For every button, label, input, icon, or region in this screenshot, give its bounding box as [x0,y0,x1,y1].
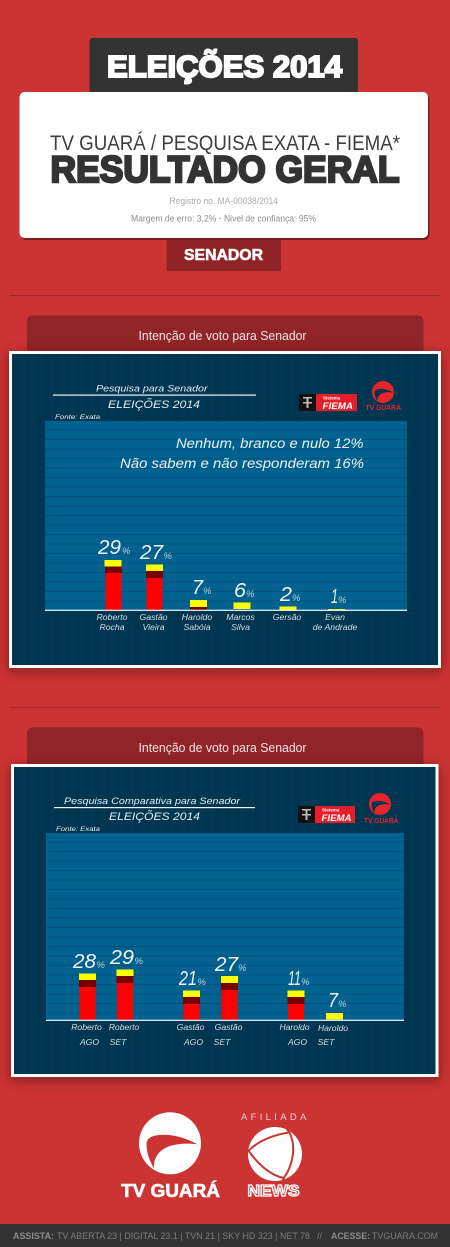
logo: afiliada record news: AFILIADA [241,1112,310,1123]
value labels: 29 [97,537,121,559]
chart title: ELEIÇÕES 2014 [109,810,200,823]
header tab: Intenção de voto para Senador [138,741,306,755]
survey name: TV GUARÁ / PESQUISA EXATA - FIEMA* [50,130,401,155]
heading: resultado geral: RESULTADO GERAL [50,149,400,190]
chart frame [12,766,437,1076]
chart title [53,384,256,421]
value labels: 27 [214,954,239,976]
candidate labels: Marcos [226,612,255,622]
plot area [45,421,407,610]
note: undecided voters [120,435,364,471]
candidate labels: AGO [287,1037,307,1047]
chart title [54,796,255,833]
value labels: % [164,551,172,562]
panel: white header card [20,92,430,240]
title banner: Eleições 2014 [90,38,358,98]
chart title: ELEIÇÕES 2014 [108,398,200,411]
chart title: Pesquisa Comparativa para Senador [64,796,241,807]
candidate labels: Haroldo [318,1023,348,1033]
candidate labels: Roberto [97,612,128,622]
logo: tv guará small [364,793,399,825]
candidate labels: de Andrade [313,622,357,632]
candidate labels: Gastão [139,612,168,622]
value labels [72,947,347,1012]
logo: tv guará small [366,381,402,412]
value labels: % [96,960,106,971]
candidate labels [97,612,357,632]
footer bar: ACESSE: [331,1231,370,1241]
value labels: % [238,963,247,974]
value labels: 21 [178,968,197,990]
registration number: Registro no. MA-00038/2014 [170,196,278,206]
logo: tv guará: TV GUARÁ [121,1180,220,1201]
value labels: % [203,586,212,597]
candidate labels: Rocha [99,622,125,632]
footer bar: TV ABERTA 23 | DIGITAL 23.1 | TVN 21 | SKY HD 323 | NET 78 [57,1231,310,1241]
margin of error: Margem de erro: 3,2% - Nivel de confiança: 95% [131,214,316,224]
candidate labels: Roberto [71,1022,102,1032]
candidate labels: Gersão [273,612,301,622]
value labels [97,537,347,608]
value labels: % [338,595,347,606]
value labels: 7 [328,990,339,1012]
logo: tv guará small: TV GUARÁ [364,816,399,825]
value labels: % [301,977,310,988]
candidate labels: Gastão [177,1022,205,1032]
note: undecided voters: Não sabem e não responderam 16% [120,455,364,471]
logo: sistema fiema: FIEMA [322,813,352,823]
note: undecided voters: Nenhum, branco e nulo 12% [176,435,364,451]
candidate labels: Haroldo [279,1022,310,1032]
plot area [46,833,404,1020]
candidate labels: SET [318,1037,335,1047]
footer bar: ASSISTA: [13,1231,54,1241]
chart title: Fonte: Exata [56,826,100,833]
value labels: 28 [72,951,96,973]
panel: voting intention chart 1 [10,316,440,666]
value labels: % [134,956,144,967]
footer bar: // [317,1231,323,1241]
header tab: Intenção de voto para Senador [138,329,306,343]
logo: sistema fiema [298,806,355,823]
candidate labels: Haroldo [182,612,212,622]
value labels: 6 [234,580,247,602]
chart frame [10,352,440,666]
logo: tv guará small: TV GUARÁ [366,403,402,412]
candidate labels: Silva [231,622,250,632]
logo: sistema fiema: Sistema [323,396,341,400]
logo: tv guará [121,1112,220,1201]
bars [79,970,343,1020]
panel: comparative voting intention chart 2 [12,728,437,1076]
logo: afiliada record news [241,1112,310,1200]
chart title: Fonte: Exata [55,414,100,421]
value labels: 29 [109,947,134,969]
value labels: 27 [139,542,164,564]
badge: senador [166,240,281,271]
title banner: Eleições 2014: ELEIÇÕES 2014 [107,48,343,84]
candidate labels: SET [214,1037,231,1047]
value labels: 11 [288,968,301,990]
footer bar [0,1224,450,1247]
candidate labels: AGO [79,1037,99,1047]
value labels: 2 [279,584,292,606]
candidate labels: AGO [183,1037,203,1047]
value labels: % [338,999,347,1010]
value labels: 7 [192,577,204,599]
chart title: Pesquisa para Senador [96,384,208,394]
value labels: % [198,977,206,988]
badge: senador: SENADOR [184,247,263,264]
candidate labels: SET [110,1037,127,1047]
logo: afiliada record news: NEWS [248,1183,300,1200]
header tab [27,316,424,360]
logo: sistema fiema: Sistema [322,808,340,812]
header tab [27,728,424,772]
value labels: % [246,589,255,600]
logo: sistema fiema: FIEMA [322,401,353,411]
candidate labels: Vieira [142,622,165,632]
bars [104,560,345,610]
footer bar: TVGUARA.COM [372,1231,438,1241]
candidate labels: Roberto [109,1022,140,1032]
candidate labels: Evan [325,612,345,622]
logo: sistema fiema [299,394,357,411]
candidate labels: Sabóia [183,622,211,632]
value labels: 1 [331,586,338,608]
value labels: % [292,593,301,604]
value labels: % [122,546,131,557]
candidate labels: Gastão [215,1022,243,1032]
candidate labels [71,1022,348,1047]
